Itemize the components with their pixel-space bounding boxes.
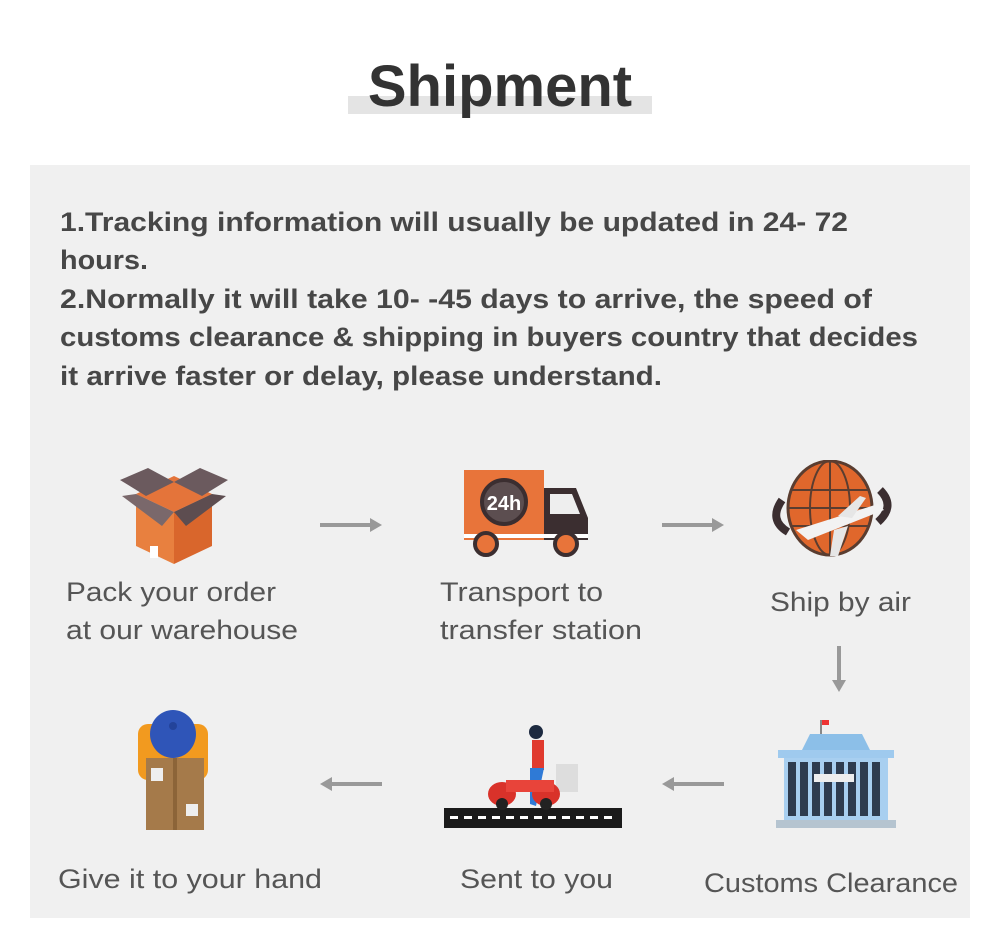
label: customs: Customs Clearance: [704, 868, 958, 898]
text block: shipping info: 2.Normally it will take 10- -45 days to arrive, the speed of: [60, 284, 873, 314]
label: pack: Pack your order: [66, 577, 276, 607]
arrow: right 1: [320, 518, 382, 532]
text block: shipping info: it arrive faster or delay, please understand.: [60, 361, 662, 391]
label: pack: at our warehouse: [66, 615, 298, 645]
icon: customs building: [776, 720, 896, 828]
label: sent: Sent to you: [460, 864, 613, 894]
label: pack: [66, 577, 298, 645]
label: transport: [440, 577, 642, 645]
arrow: left 2: [662, 777, 724, 791]
label: give: Give it to your hand: [58, 864, 322, 894]
icon: box: [120, 468, 228, 564]
text block: shipping info: hours.: [60, 245, 148, 275]
title: Shipment: [368, 54, 632, 119]
icon: person with box: [138, 710, 208, 830]
icon: globe with plane: [772, 460, 892, 556]
label: transport: transfer station: [440, 615, 642, 645]
label: ship by air: Ship by air: [770, 587, 911, 617]
arrow: left 1: [320, 777, 382, 791]
panel: shipment process: [30, 165, 970, 918]
text block: shipping info: customs clearance & shipping in buyers country that decides: [60, 322, 918, 352]
text block: shipping info: [60, 207, 918, 391]
text block: shipping info: 1.Tracking information will usually be updated in 24- 72: [60, 207, 848, 237]
icon: scooter: [444, 725, 622, 828]
icon: truck: [464, 470, 588, 557]
icon: truck: 24h: [487, 493, 521, 515]
arrow: down: [832, 646, 846, 692]
label: transport: Transport to: [440, 577, 603, 607]
arrow: right 2: [662, 518, 724, 532]
